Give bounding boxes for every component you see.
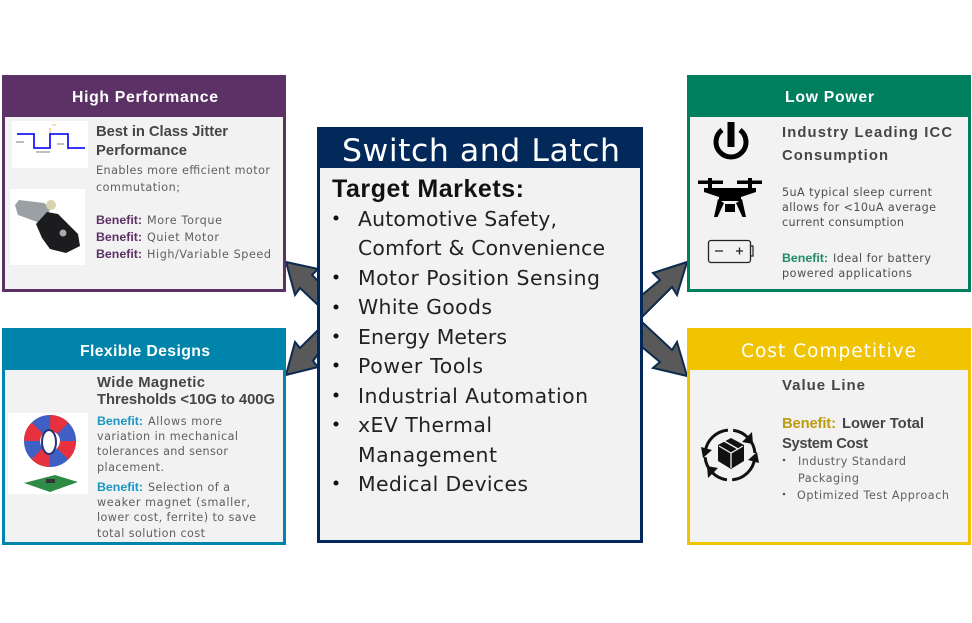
text: second benefit: total solution cost <box>97 527 206 540</box>
text: jitter description: commutation; <box>96 181 180 194</box>
text: thresholds heading: Wide Magnetic <box>97 375 205 391</box>
panel: Cost Competitive <box>687 328 971 544</box>
text: jitter description <box>96 164 270 194</box>
panel: High Performance <box>2 75 286 290</box>
text: second benefit: weaker magnet (smaller, <box>97 496 250 509</box>
text: thresholds heading <box>97 375 275 408</box>
list: cost factors: Packaging <box>798 472 859 485</box>
list: cost factors: Industry Standard <box>798 455 906 468</box>
text: benefits <box>96 213 271 261</box>
list: target markets: Medical Devices <box>358 472 528 496</box>
list: target markets: Power Tools <box>358 354 483 378</box>
text: sleep current description: current consumption <box>782 216 904 229</box>
icon: battery <box>708 240 753 262</box>
panel: Switch and Latch <box>318 127 643 542</box>
text: jitter heading: Performance <box>96 143 187 159</box>
text: lower system cost benefit <box>782 416 924 452</box>
text: second benefit: lower cost, ferrite) to save <box>97 511 256 524</box>
heading: Target Markets: Target Markets: <box>332 175 524 203</box>
panel: Flexible Designs <box>2 328 286 544</box>
heading: Cost Competitive: Cost Competitive <box>741 341 916 362</box>
text: jitter description: Enables more efficient motor <box>96 164 270 177</box>
text: ICC heading: Industry Leading ICC <box>782 125 952 141</box>
list: target markets: Management <box>358 443 497 467</box>
heading: High Performance: High Performance <box>72 89 218 106</box>
list: cost factors <box>783 455 949 502</box>
text: sleep current description: 5uA typical sleep current <box>782 186 933 199</box>
icon: box with recycling arrows <box>701 430 759 480</box>
icon: drone <box>698 178 762 217</box>
title: Switch and Latch: Switch and Latch <box>342 133 620 169</box>
text: first benefit: tolerances and sensor <box>97 445 228 458</box>
text: ICC heading: Consumption <box>782 148 888 164</box>
text: first benefit: Allows more <box>148 415 222 428</box>
text: battery benefit <box>782 251 931 280</box>
text: sleep current description: allows for <10uA average <box>782 201 936 214</box>
text: benefits: Benefit: <box>96 230 142 244</box>
text: first benefit: placement. <box>97 461 164 474</box>
text: sleep current description <box>782 186 936 229</box>
arrow: to Flexible Designs <box>286 330 318 375</box>
arrow: to Low Power <box>642 262 687 317</box>
text: lower system cost benefit: System Cost <box>782 436 868 452</box>
list: target markets: Energy Meters <box>358 325 507 349</box>
image: ring magnet over circuit board <box>8 413 88 494</box>
text: second benefit <box>97 480 256 540</box>
list: target markets: Motor Position Sensing <box>358 266 600 290</box>
arrows: centre to panels <box>286 262 687 376</box>
text: battery benefit: powered applications <box>782 267 912 280</box>
text: first benefit: Benefit: <box>97 414 143 428</box>
heading: Flexible Designs: Flexible Designs <box>80 343 210 360</box>
arrow: to Cost Competitive <box>642 322 687 376</box>
text: first benefit: variation in mechanical <box>97 430 238 443</box>
text: Value Line: Value Line <box>782 377 865 394</box>
arrow: to High Performance <box>286 262 318 305</box>
chart: jitter waveform <box>12 121 88 168</box>
heading: Low Power: Low Power <box>785 89 874 106</box>
text: lower system cost benefit: Lower Total <box>842 416 924 432</box>
list: target markets: White Goods <box>358 295 492 319</box>
text: thresholds heading: Thresholds <10G to 400G <box>97 392 275 408</box>
text: jitter heading: Best in Class Jitter <box>96 124 228 140</box>
text: benefits: More Torque <box>147 214 222 227</box>
text: lower system cost benefit: Benefit: <box>782 416 836 432</box>
list: target markets <box>334 207 605 496</box>
text: battery benefit: Ideal for battery <box>833 252 931 265</box>
text: benefits: Benefit: <box>96 247 142 261</box>
list: target markets: xEV Thermal <box>358 413 492 437</box>
text: second benefit: Selection of a <box>148 481 230 494</box>
text: jitter heading <box>96 124 228 159</box>
text: benefits: Benefit: <box>96 213 142 227</box>
panel: Low Power <box>687 75 971 290</box>
text: second benefit: Benefit: <box>97 480 143 494</box>
text: battery benefit: Benefit: <box>782 251 828 265</box>
text: ICC heading <box>782 125 952 164</box>
text: first benefit <box>97 414 238 474</box>
list: target markets: Automotive Safety, <box>358 207 557 231</box>
icon: power symbol <box>716 122 746 157</box>
text: benefits: High/Variable Speed <box>147 248 271 261</box>
list: target markets: Comfort & Convenience <box>358 236 605 260</box>
image: motor assembly <box>10 189 85 265</box>
text: benefits: Quiet Motor <box>147 231 219 244</box>
list: target markets: Industrial Automation <box>358 384 588 408</box>
list: cost factors: Optimized Test Approach <box>797 489 949 502</box>
